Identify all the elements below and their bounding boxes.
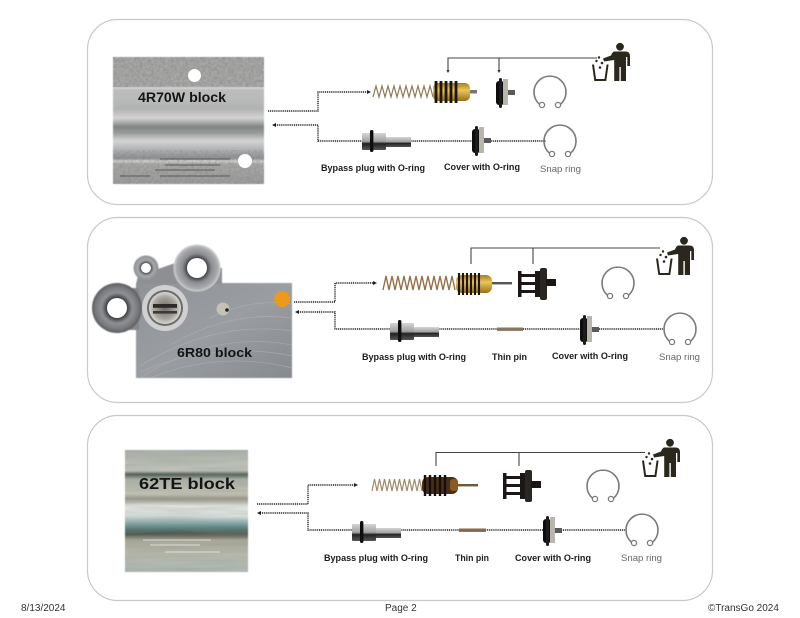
cover with o-ring bbox=[472, 126, 491, 156]
connecting dotted line bbox=[352, 529, 627, 531]
arrow: block to spring bbox=[268, 90, 371, 111]
snap ring bbox=[664, 313, 696, 345]
arrow: plug return to block bbox=[295, 310, 390, 329]
footer date: 8/13/2024 bbox=[21, 603, 66, 614]
icon: person with trash bin bbox=[657, 237, 694, 275]
label: thin pin: Thin pin bbox=[455, 553, 489, 564]
6R80 block photo bbox=[92, 244, 292, 378]
footer page number: Page 2 bbox=[385, 603, 417, 614]
snap ring removed bbox=[602, 267, 634, 299]
panel frame bbox=[88, 416, 712, 600]
orange marker bbox=[274, 291, 290, 307]
label: bypass plug: Bypass plug with O-ring bbox=[324, 553, 428, 564]
thin pin bbox=[497, 328, 523, 331]
arrow: block to spring bbox=[294, 281, 377, 302]
panel: 4R70W bbox=[88, 20, 712, 204]
bypass plug bbox=[390, 320, 439, 342]
icon: person with trash bin bbox=[643, 439, 680, 477]
block label: 6R80 block bbox=[177, 346, 252, 360]
panel: 6R80 bbox=[88, 218, 712, 402]
bypass plug bbox=[352, 521, 401, 543]
cover removed bbox=[496, 78, 515, 108]
discard bracket bbox=[446, 58, 597, 73]
cage valve removed bbox=[503, 470, 541, 502]
label: snap ring: Snap ring bbox=[621, 553, 662, 564]
label: snap ring: Snap ring bbox=[659, 352, 700, 363]
block label: 4R70W block bbox=[138, 90, 227, 105]
label: cover: Cover with O-ring bbox=[515, 553, 591, 564]
arrow: plug return to block bbox=[257, 511, 352, 530]
label: bypass plug: Bypass plug with O-ring bbox=[362, 352, 466, 363]
arrow: plug return to block bbox=[272, 123, 362, 141]
62TE block photo bbox=[125, 450, 248, 572]
panel: 62TE bbox=[88, 416, 712, 600]
block label: 62TE block bbox=[139, 476, 235, 493]
spring with valve bbox=[383, 273, 512, 295]
label: thin pin: Thin pin bbox=[492, 352, 527, 363]
connecting dotted line bbox=[390, 328, 665, 330]
snap ring removed bbox=[534, 76, 566, 108]
spring with valve bbox=[372, 475, 478, 496]
thin pin bbox=[459, 528, 486, 532]
cover with o-ring bbox=[580, 315, 599, 345]
4R70W block photo bbox=[113, 57, 264, 184]
icon: person with trash bin bbox=[593, 43, 630, 81]
bypass plug bbox=[362, 130, 411, 152]
discard bracket bbox=[436, 452, 645, 466]
snap ring removed bbox=[587, 470, 619, 502]
snap ring bbox=[626, 514, 658, 546]
panel frame bbox=[88, 20, 712, 204]
discard bracket bbox=[471, 248, 660, 264]
arrow: block to spring bbox=[257, 483, 358, 504]
cover with o-ring bbox=[543, 516, 562, 546]
cage valve removed bbox=[518, 268, 556, 300]
connecting dotted line bbox=[362, 140, 546, 142]
footer copyright: ©TransGo 2024 bbox=[708, 603, 779, 614]
snap ring bbox=[544, 125, 576, 157]
label: cover: Cover with O-ring bbox=[444, 162, 520, 173]
label: cover: Cover with O-ring bbox=[552, 351, 628, 362]
label: bypass plug: Bypass plug with O-ring bbox=[321, 163, 425, 174]
label: snap ring: Snap ring bbox=[540, 164, 581, 175]
panel frame bbox=[88, 218, 712, 402]
spring with valve bbox=[373, 81, 477, 103]
